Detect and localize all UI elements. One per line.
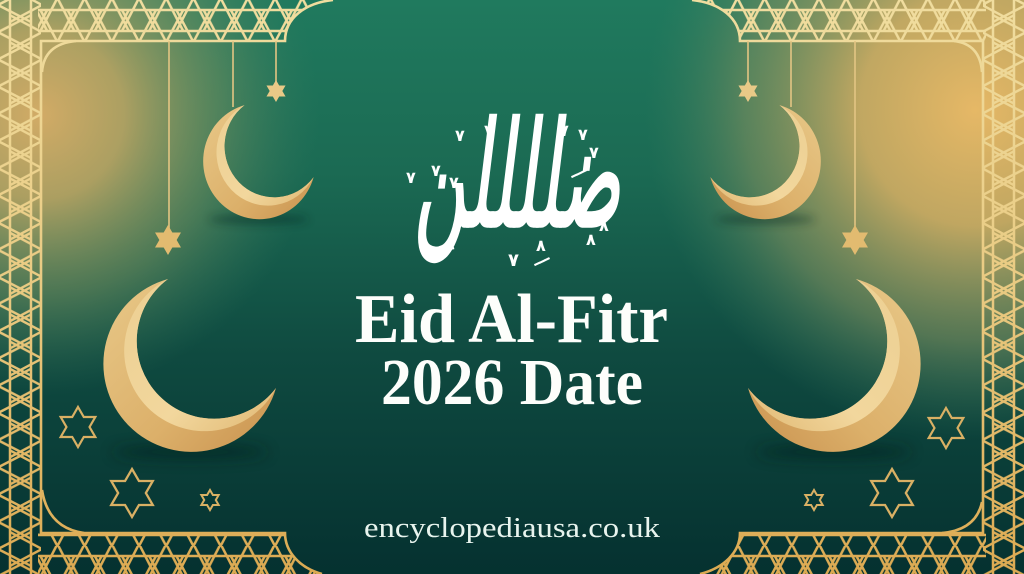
website url: encyclopediausa.co.uk (364, 512, 661, 544)
arabic calligraphy: ٧ (578, 125, 588, 144)
arabic calligraphy: ٧ (484, 121, 494, 140)
subtitle: 2026 Date (381, 346, 643, 419)
outline stars (61, 407, 963, 517)
arabic calligraphy: ضللللن (410, 92, 636, 261)
title: Eid Al-Fitr (355, 281, 668, 358)
icon: small crescent left (203, 105, 314, 224)
arabic calligraphy: ٧ (559, 121, 569, 140)
arabic calligraphy: ٧ (449, 173, 459, 192)
arabic calligraphy: ٨ (586, 230, 596, 249)
arabic calligraphy: ٧ (589, 143, 599, 162)
arabic calligraphy: ٧ (406, 168, 416, 187)
arabic calligraphy: ـــ (434, 234, 455, 256)
arabic calligraphy: ٨ (536, 236, 546, 255)
arabic calligraphy: ٧ (508, 250, 519, 271)
arabic calligraphy: ٨ (599, 216, 609, 235)
arabic calligraphy: ـــ (565, 157, 589, 182)
icon: hanging star right outer (842, 225, 868, 255)
icon: hanging star right inner (738, 80, 758, 102)
icon: hanging star left outer (155, 225, 181, 255)
hanging strings (169, 41, 855, 230)
icon: hanging star left inner (266, 80, 286, 102)
arabic calligraphy: ٧ (455, 126, 465, 145)
icon: small crescent right (710, 105, 821, 224)
arabic calligraphy: ـــ (528, 245, 552, 270)
icon: large crescent left (103, 279, 276, 459)
arabic calligraphy: ٧ (431, 161, 441, 180)
icon: large crescent right (748, 279, 921, 459)
